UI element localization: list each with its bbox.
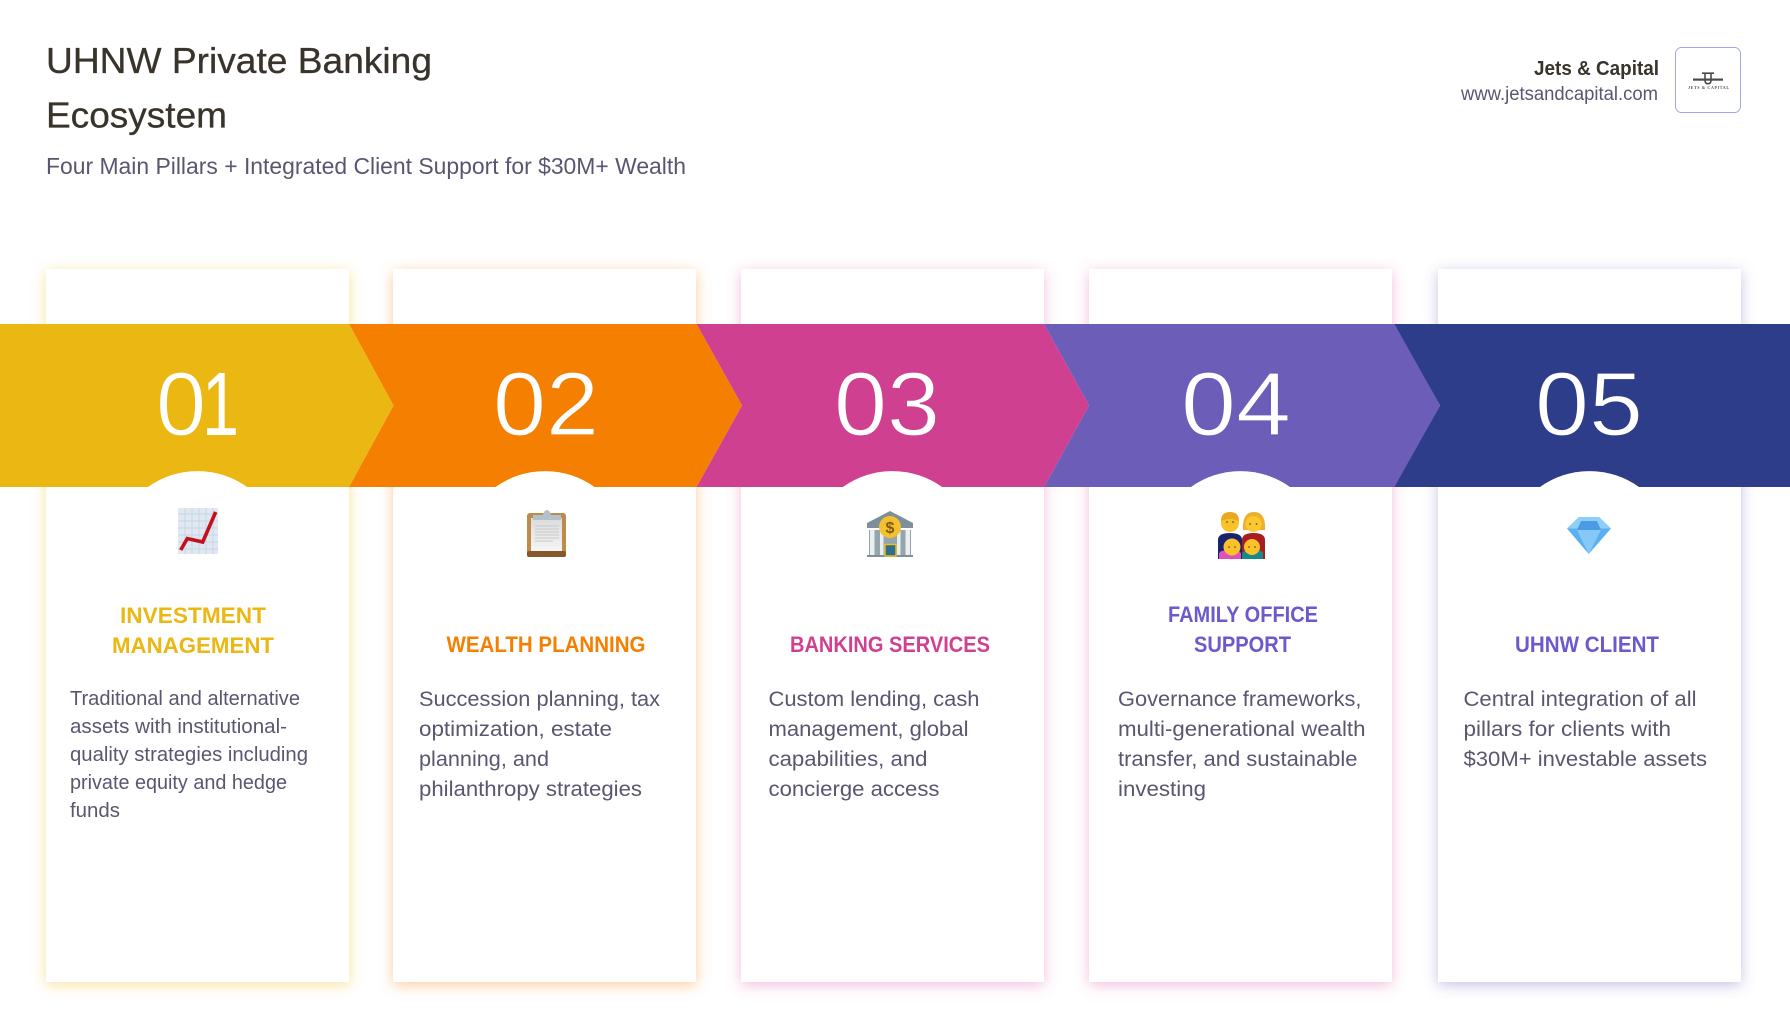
description: optimization, estate (419, 717, 612, 741)
description: funds (70, 800, 120, 822)
chevron band (0, 324, 1790, 487)
brand block: Jets & Capital (1534, 58, 1659, 80)
panel: uhnw client (1438, 269, 1741, 982)
description: pillars for clients with (1464, 717, 1671, 741)
panel: investment management (46, 269, 349, 982)
chevron 01: 0 (156, 355, 206, 455)
chevron 03: 03 (834, 355, 940, 455)
title: Ecosystem (46, 94, 227, 136)
chevron 01 (0, 324, 394, 487)
chevron 05 (1394, 324, 1790, 487)
description: Central integration of all (1464, 687, 1696, 711)
icon notch 4 (1191, 471, 1290, 487)
brand block (1460, 48, 1740, 112)
title (46, 40, 432, 136)
panel: wealth planning (393, 269, 696, 982)
description: Governance frameworks, (1118, 687, 1362, 711)
heading: MANAGEMENT (112, 633, 275, 658)
icon notch 5 (1540, 471, 1639, 487)
chevron 03 (696, 324, 1089, 487)
icon: bank: $ (886, 520, 895, 537)
description (419, 687, 660, 801)
description: philanthropy strategies (419, 777, 642, 801)
icon notch 1 (148, 471, 247, 487)
description (768, 687, 980, 801)
description: Traditional and alternative (70, 688, 300, 710)
chevron 02: 02 (493, 355, 599, 455)
chevron 02 (349, 324, 742, 487)
chevron 04: 04 (1181, 355, 1291, 455)
description: transfer, and sustainable (1118, 747, 1358, 771)
description: Succession planning, tax (419, 687, 660, 711)
heading: SUPPORT (1194, 632, 1292, 657)
description: capabilities, and (768, 747, 928, 771)
heading: WEALTH PLANNING (446, 632, 646, 657)
heading (1168, 602, 1318, 657)
heading: BANKING SERVICES (790, 632, 990, 657)
icon: diamond (1567, 517, 1611, 554)
heading (112, 603, 275, 658)
description: assets with institutional- (70, 716, 287, 738)
brand block: www.jetsandcapital.com (1460, 84, 1658, 105)
logo box: JETS & CAPITAL (1688, 85, 1729, 90)
panel: family office support (1089, 269, 1392, 982)
logo box (1676, 48, 1740, 112)
heading: INVESTMENT (120, 603, 267, 628)
chevron 01: 1 (202, 355, 239, 455)
subtitle: Four Main Pillars + Integrated Client Support for $30M+ Wealth (46, 153, 686, 179)
icon: family (1218, 512, 1265, 559)
title: UHNW Private Banking (46, 40, 432, 81)
icon: clipboard (527, 510, 566, 557)
description: planning, and (419, 747, 549, 771)
description: multi-generational wealth (1118, 717, 1366, 741)
description: private equity and hedge (70, 772, 287, 794)
icon: chart (178, 508, 218, 554)
panel: banking services (741, 269, 1044, 982)
description: Custom lending, cash (768, 687, 980, 711)
description (70, 688, 308, 822)
description: concierge access (768, 777, 940, 801)
chevron 05: 05 (1535, 355, 1643, 455)
icon: bank (867, 511, 913, 557)
description (1118, 687, 1366, 801)
description: $30M+ investable assets (1464, 747, 1707, 771)
description (1464, 687, 1707, 771)
icon notch 3 (843, 471, 942, 487)
heading: UHNW CLIENT (1515, 632, 1660, 657)
description: investing (1118, 777, 1206, 801)
chevron 04 (1044, 324, 1440, 487)
description: management, global (768, 717, 968, 741)
description: quality strategies including (70, 744, 308, 766)
heading: FAMILY OFFICE (1168, 602, 1318, 627)
icon notch 2 (496, 471, 594, 487)
